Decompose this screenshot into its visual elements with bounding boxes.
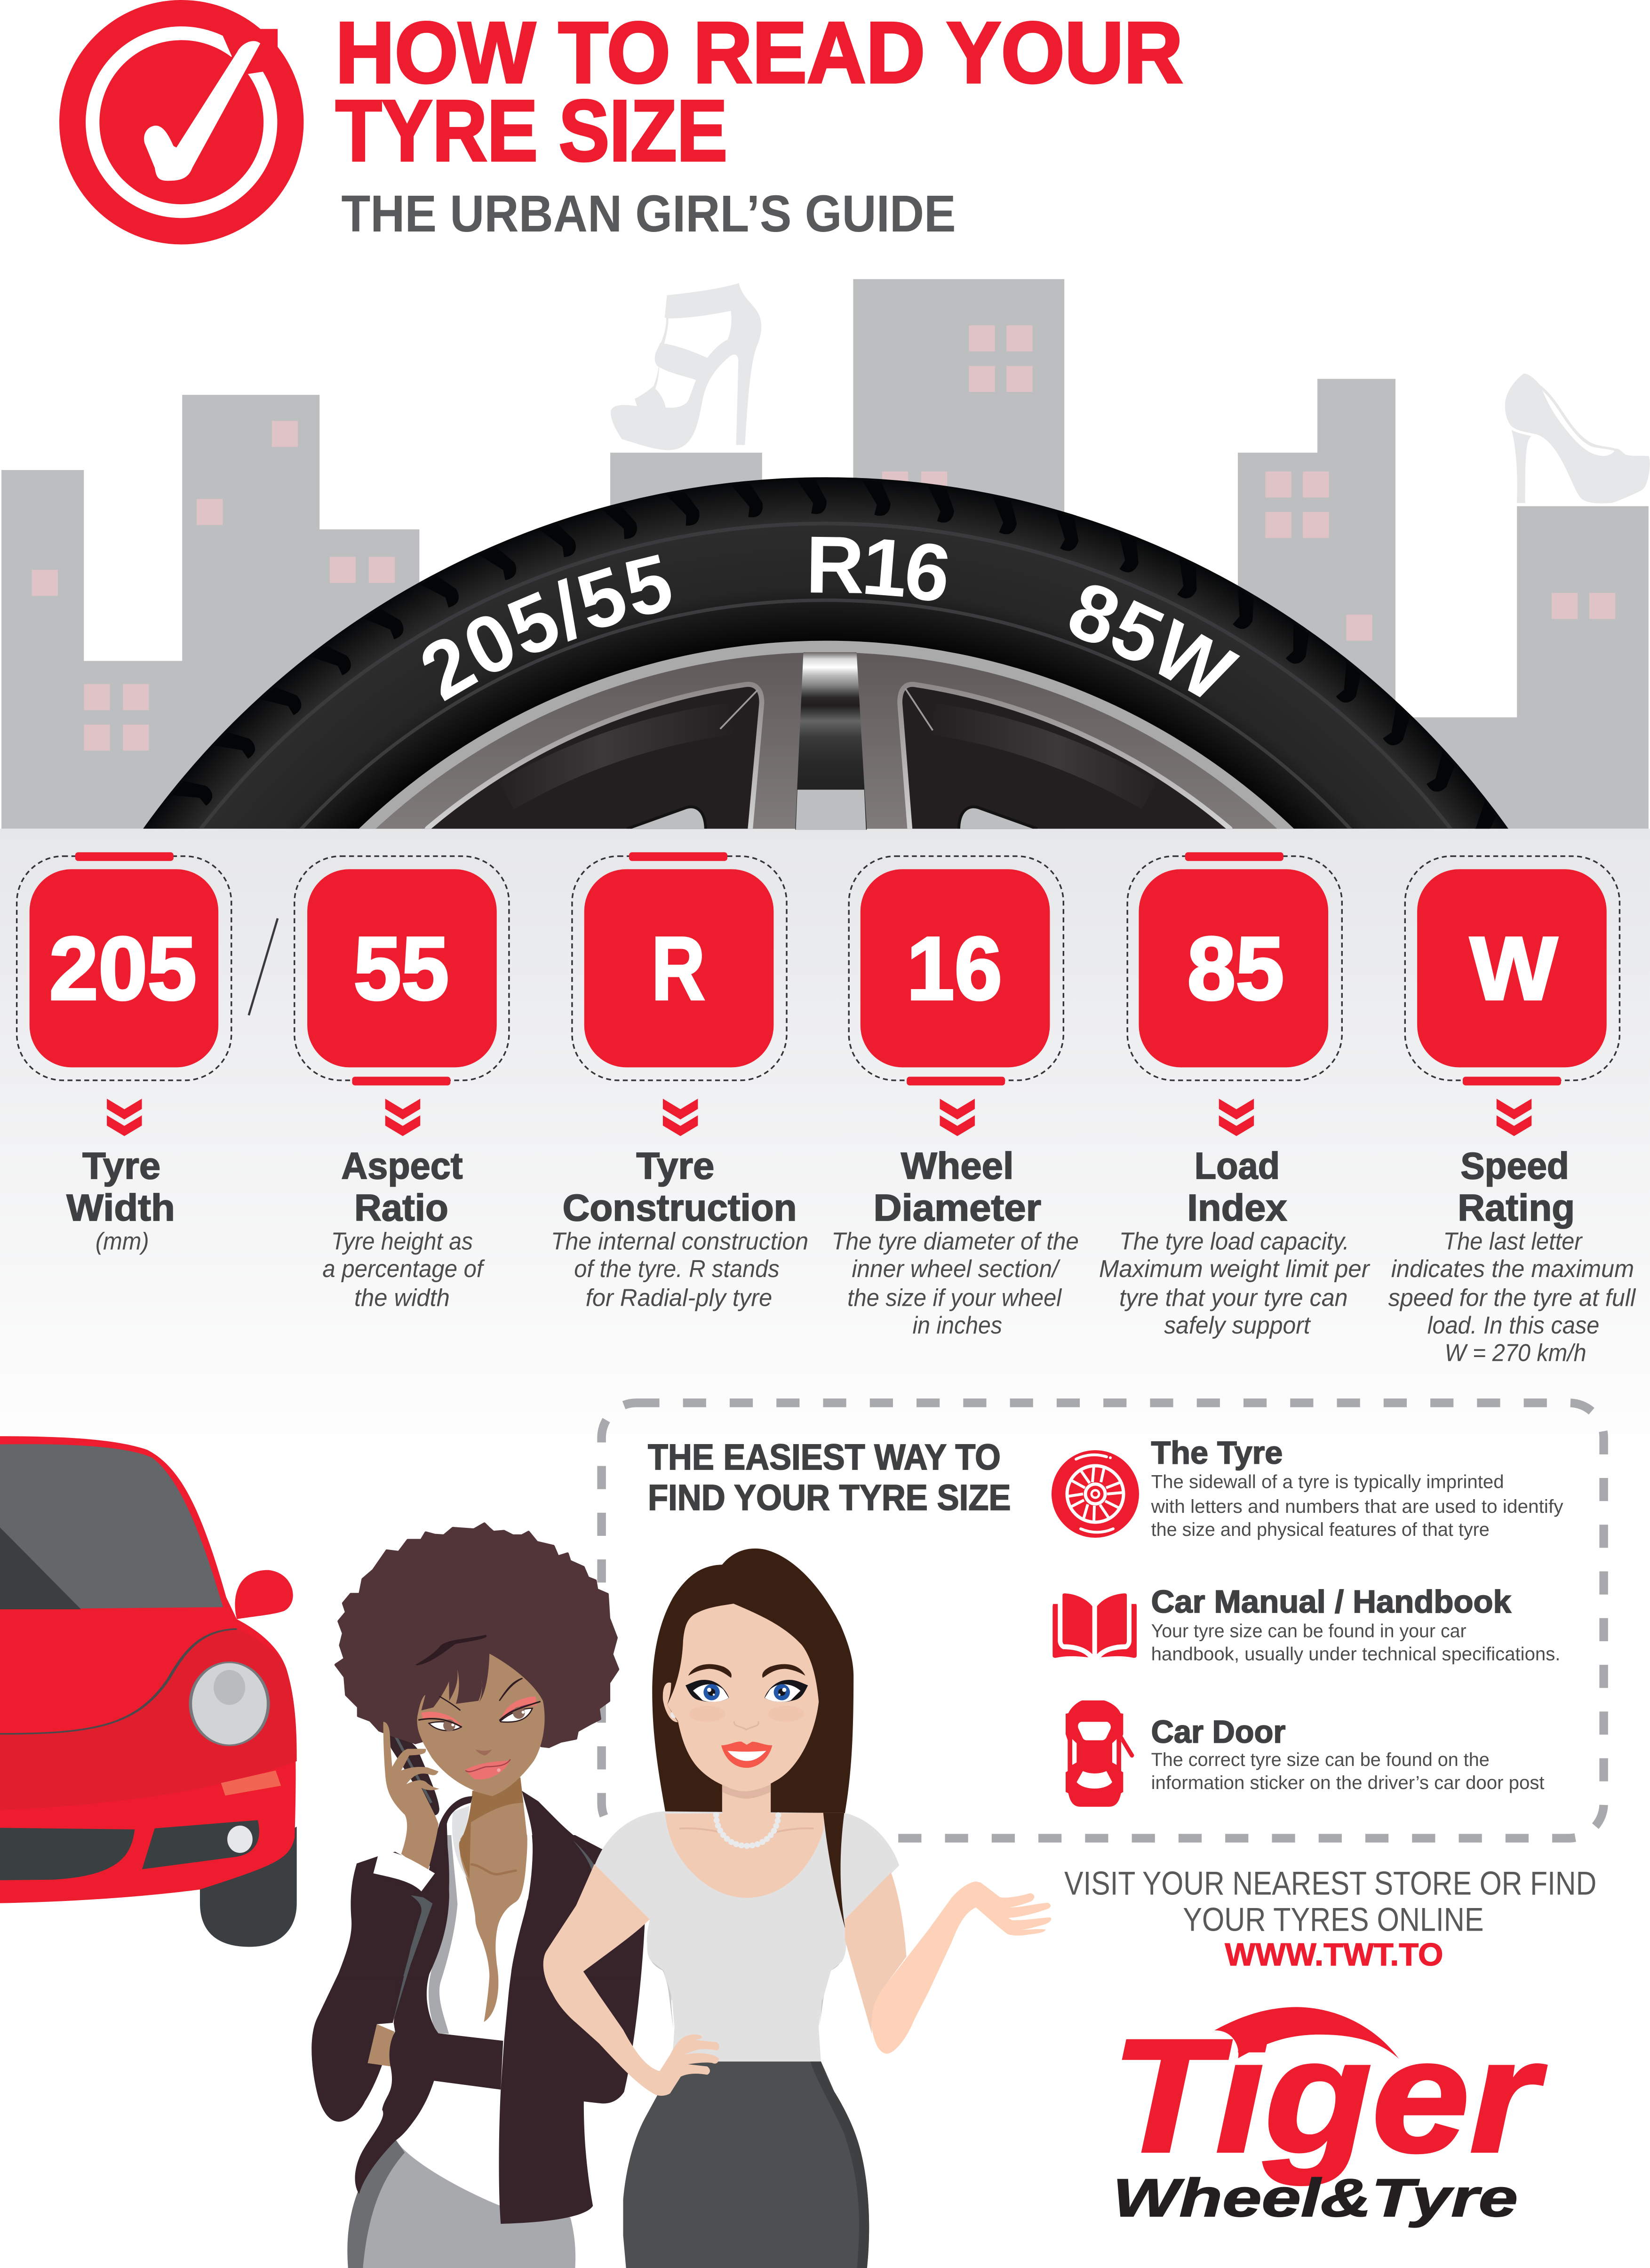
white shirt cuff xyxy=(374,1853,435,1892)
info: car manual: Car Manual / Handbook xyxy=(1151,1584,1511,1620)
column: load index: Load xyxy=(1195,1145,1280,1187)
column: speed rating: W = 270 km/h xyxy=(1445,1339,1586,1366)
card numbers: 205 xyxy=(49,918,197,1019)
left wheel opening xyxy=(430,687,759,830)
icon: tyre xyxy=(1052,1450,1139,1538)
column: speed rating: Speed xyxy=(1460,1145,1569,1187)
info: the tyre: the size and physical features of that tyre xyxy=(1151,1519,1490,1540)
eyebrow and eyes xyxy=(499,1678,522,1701)
call to action xyxy=(1064,1864,1596,1973)
raised upper arm xyxy=(845,1872,907,2034)
icon: car top view xyxy=(1066,1701,1134,1807)
title xyxy=(335,4,1183,179)
logo: Tiger Wheel & Tyre: Wheel&Tyre xyxy=(1113,2168,1518,2228)
call to action: WWW.TWT.TO xyxy=(1225,1937,1443,1973)
card numbers: 85 xyxy=(1187,918,1284,1019)
red accent pills xyxy=(75,852,1561,1086)
woman two: upper body and face xyxy=(595,1549,899,2000)
column: wheel diameter: inner wheel section/ xyxy=(852,1255,1060,1283)
column: tyre width: (mm) xyxy=(96,1228,149,1255)
column: wheel diameter: the size if your wheel xyxy=(847,1284,1062,1311)
necklace xyxy=(716,1815,778,1846)
ear and earring xyxy=(663,1683,678,1722)
red cards xyxy=(30,869,1607,1067)
neck and chest xyxy=(460,1777,527,1976)
collar and lapel xyxy=(452,1806,470,1879)
hip arm xyxy=(543,1864,719,2096)
nose xyxy=(734,1722,758,1730)
column: wheel diameter: Wheel xyxy=(901,1145,1014,1187)
slash divider xyxy=(249,918,278,1015)
info: car door xyxy=(1151,1715,1545,1793)
column: wheel diameter: Diameter xyxy=(873,1187,1041,1229)
raised forearm and hand xyxy=(872,1882,1051,2054)
smile xyxy=(721,1741,772,1768)
column: speed rating: Rating xyxy=(1458,1187,1575,1229)
wheel bottom windows xyxy=(628,808,704,830)
column: tyre width: Width xyxy=(66,1187,175,1229)
woman two: skirt and waist xyxy=(623,1918,869,2268)
phone xyxy=(375,1711,439,1815)
city skyline xyxy=(1,279,1649,829)
column: load index: safely support xyxy=(1164,1312,1311,1339)
face xyxy=(417,1653,545,1796)
card numbers: 16 xyxy=(907,918,1002,1019)
column: aspect ratio xyxy=(322,1145,486,1311)
column: load index: Maximum weight limit per xyxy=(1099,1255,1371,1283)
woman one: lower body xyxy=(311,1835,650,2268)
column: tyre width xyxy=(66,1145,175,1255)
info: car door: Car Door xyxy=(1151,1715,1285,1750)
column: wheel diameter: in inches xyxy=(912,1312,1002,1339)
column: aspect ratio: the width xyxy=(354,1284,450,1311)
shoe: strappy sandal xyxy=(611,283,761,450)
column: tyre width: Tyre xyxy=(82,1145,160,1187)
column: speed rating: The last letter xyxy=(1443,1228,1583,1255)
tyre sidewall text: R16 xyxy=(805,519,953,620)
info: the tyre: with letters and numbers that are used to identify xyxy=(1151,1496,1563,1517)
column: speed rating: indicates the maximum xyxy=(1391,1255,1634,1283)
column: tyre construction xyxy=(551,1145,808,1311)
column: load index: tyre that your tyre can xyxy=(1119,1284,1348,1311)
column: speed rating xyxy=(1388,1145,1636,1366)
column: aspect ratio: Ratio xyxy=(354,1187,448,1229)
column: tyre construction: of the tyre. R stands xyxy=(574,1255,780,1283)
woman one: jacket pocket fold xyxy=(393,1895,432,2023)
blush xyxy=(689,1706,725,1722)
column: tyre construction: Construction xyxy=(563,1187,797,1229)
info: car manual: handbook, usually under technical specifications. xyxy=(1151,1644,1560,1664)
face xyxy=(667,1604,819,1791)
double chevrons xyxy=(106,1098,1532,1137)
column: load index xyxy=(1099,1145,1371,1339)
call to action: YOUR TYRES ONLINE xyxy=(1183,1901,1484,1938)
info: car door: information sticker on the driver’s car door post xyxy=(1151,1773,1545,1793)
size cards row xyxy=(17,852,1619,1137)
tyre sidewall text: 205/55 xyxy=(406,536,682,718)
panel heading: FIND YOUR TYRE SIZE xyxy=(648,1477,1011,1518)
jacket shoulders xyxy=(511,1791,645,1976)
column: wheel diameter: The tyre diameter of the xyxy=(831,1228,1079,1255)
tyre and alloy wheel xyxy=(143,477,1508,829)
tyre sidewall text: 85W xyxy=(1057,564,1249,720)
card numbers: 55 xyxy=(353,918,449,1019)
card numbers: R xyxy=(652,918,705,1019)
column: aspect ratio: a percentage of xyxy=(322,1255,486,1283)
hair back xyxy=(652,1549,853,1928)
info: car manual: Your tyre size can be found in your car xyxy=(1151,1621,1467,1641)
subtitle: THE URBAN GIRL’S GUIDE xyxy=(341,185,956,243)
title: TYRE SIZE xyxy=(335,82,727,179)
info: the tyre xyxy=(1151,1435,1563,1540)
column: aspect ratio: Aspect xyxy=(341,1145,463,1187)
logo: Tiger Wheel & Tyre: Tiger xyxy=(1111,2006,1546,2187)
left sleeve top xyxy=(337,1856,422,1976)
hair strand xyxy=(415,1635,486,1665)
dashed panel outline xyxy=(602,1403,1604,1838)
wheel centre spoke xyxy=(795,652,867,830)
column: wheel diameter xyxy=(831,1145,1079,1339)
card numbers: W xyxy=(1470,918,1557,1019)
column: speed rating: load. In this case xyxy=(1427,1312,1599,1339)
woman one: upper body, face and phone xyxy=(336,1524,645,1976)
nose and lips xyxy=(475,1749,492,1756)
column: speed rating: speed for the tyre at full xyxy=(1388,1284,1636,1311)
building windows xyxy=(32,326,1615,751)
tyre sidewall text xyxy=(406,519,1258,738)
column: load index: Index xyxy=(1187,1187,1287,1229)
panel heading: THE EASIEST WAY TO xyxy=(648,1437,1001,1477)
front hair strand xyxy=(823,1813,845,1928)
icon: open book xyxy=(1052,1593,1137,1658)
info: car manual xyxy=(1151,1584,1560,1664)
woman two: arms xyxy=(543,1864,1051,2096)
column: tyre construction: for Radial-ply tyre xyxy=(586,1284,772,1311)
shoe: high heel xyxy=(1505,374,1650,503)
right eye and brow xyxy=(762,1664,808,1702)
title: HOW TO READ YOUR xyxy=(335,4,1183,101)
info: car door: The correct tyre size can be found on the xyxy=(1151,1749,1490,1770)
column: tyre construction: The internal construction xyxy=(551,1228,808,1255)
info: the tyre: The Tyre xyxy=(1151,1435,1283,1470)
jacket grey fold xyxy=(573,1840,601,1878)
card numbers xyxy=(49,918,1557,1019)
column: load index: The tyre load capacity. xyxy=(1119,1228,1349,1255)
hand on phone xyxy=(383,1722,439,1873)
column: tyre construction: Tyre xyxy=(636,1145,714,1187)
shirt xyxy=(595,1812,899,2000)
right wheel opening xyxy=(902,687,1228,830)
tread grooves xyxy=(178,485,1493,829)
neck xyxy=(722,1781,771,1814)
column: aspect ratio: Tyre height as xyxy=(331,1228,473,1255)
info: the tyre: The sidewall of a tyre is typically imprinted xyxy=(1151,1472,1504,1493)
red car xyxy=(0,1436,297,1947)
left eye and brow xyxy=(686,1664,732,1702)
panel heading xyxy=(648,1437,1011,1518)
icon: red check badge xyxy=(59,0,303,244)
lower section gradient background xyxy=(0,829,1650,1479)
neckline xyxy=(665,1813,824,1898)
dashed card outlines xyxy=(17,856,1619,1080)
afro hair xyxy=(336,1524,618,1747)
